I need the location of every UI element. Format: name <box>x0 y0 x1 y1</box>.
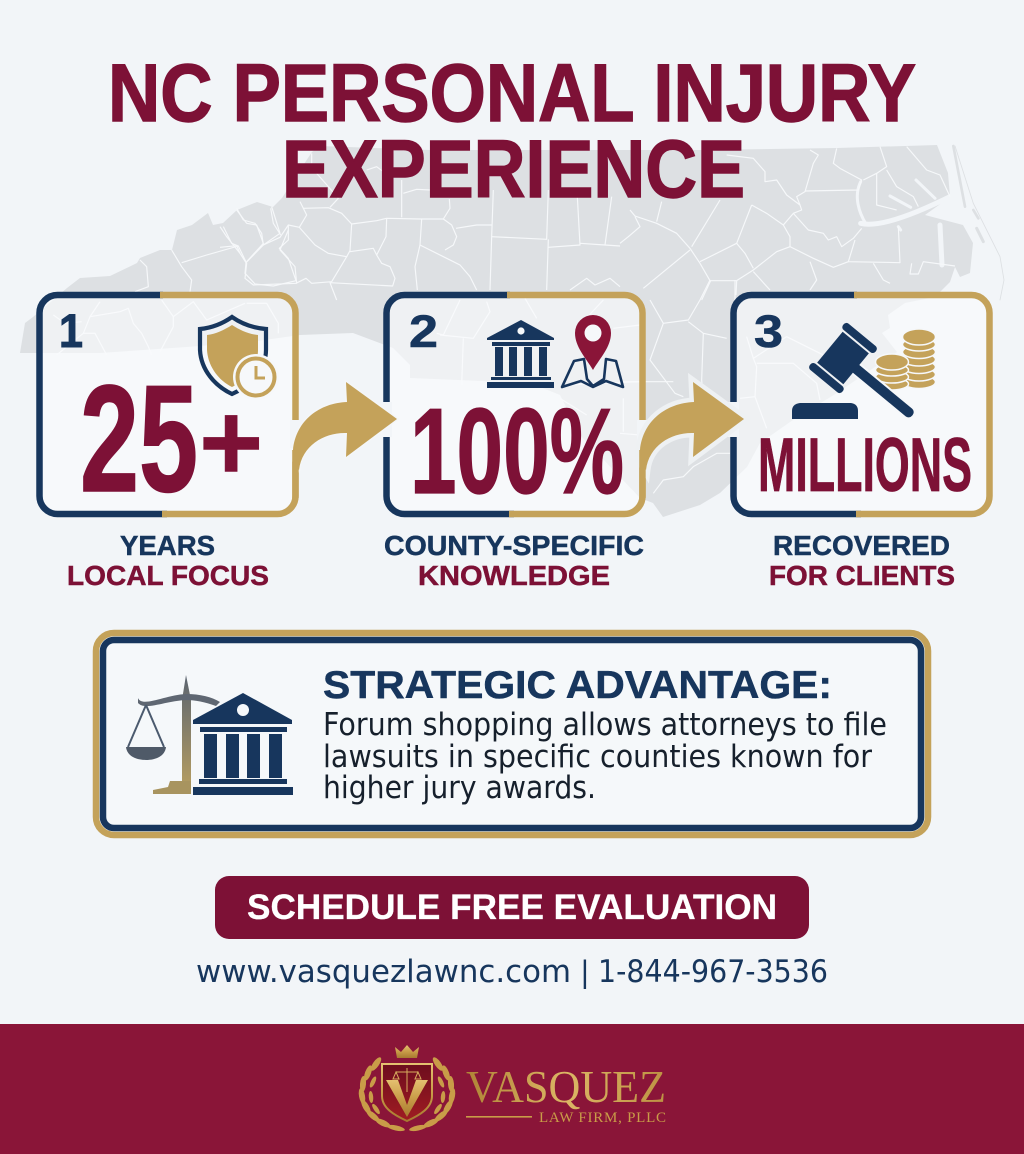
caption: step 1: LOCAL FOCUS <box>67 560 269 591</box>
letter V <box>386 1080 428 1117</box>
icon: gavel <box>792 321 932 439</box>
icon: shield with clock <box>200 317 279 400</box>
caption: step 3: FOR CLIENTS <box>769 560 955 591</box>
icon: map pin on folded map <box>562 315 623 387</box>
small scales <box>393 1068 421 1092</box>
arrow: step 2 to step 3 <box>637 382 744 498</box>
caption: step 2: COUNTY-SPECIFIC <box>384 530 644 561</box>
laurel wreath, left <box>358 1056 405 1132</box>
caption: step 1 <box>67 530 269 591</box>
contact line <box>196 954 828 990</box>
panel: step 1, 25+ years <box>40 295 296 524</box>
caption: step 3: RECOVERED <box>773 530 950 561</box>
caption: step 2 <box>384 530 644 591</box>
caption: step 1: YEARS <box>120 530 215 561</box>
logo: wordmark: LAW FIRM, PLLC <box>539 1110 666 1126</box>
icon: scales of justice <box>126 675 220 794</box>
body text: lawsuits in specific counties known for <box>323 739 872 775</box>
heading: STRATEGIC ADVANTAGE: <box>323 664 832 707</box>
logo: crest <box>358 1045 456 1132</box>
body text: Forum shopping allows attorneys to file <box>323 707 887 743</box>
body text <box>323 707 887 806</box>
footer band <box>0 1024 1024 1154</box>
laurel wreath, right <box>409 1056 456 1132</box>
statistic 100%: 100% <box>410 383 624 519</box>
icon: coin stacks <box>876 329 936 390</box>
step number 2: 2 <box>409 306 438 357</box>
title <box>108 48 916 215</box>
step number 1: 1 <box>59 304 83 357</box>
arrow: step 1 to step 2 <box>290 382 397 498</box>
body text: higher jury awards. <box>323 770 596 806</box>
call to action button: SCHEDULE FREE EVALUATION <box>247 888 777 927</box>
contact line: | <box>580 955 590 989</box>
statistic 25+: 25 <box>80 354 198 524</box>
logo: wordmark: VASQUEZ <box>466 1062 666 1112</box>
contact line: 1-844-967-3536 <box>598 954 828 990</box>
title: EXPERIENCE <box>282 124 745 215</box>
step number 3: 3 <box>754 306 783 357</box>
title: NC PERSONAL INJURY <box>108 48 916 139</box>
caption: step 2: KNOWLEDGE <box>418 560 610 591</box>
call to action button <box>215 876 809 939</box>
background map: North Carolina counties <box>20 145 1004 517</box>
shield <box>382 1064 432 1121</box>
contact line: www.vasquezlawnc.com <box>196 954 571 990</box>
panel: step 3, millions recovered <box>734 295 990 514</box>
icon: courthouse <box>193 693 293 795</box>
statistic 25+: + <box>199 381 263 504</box>
icon: courthouse <box>487 320 554 388</box>
crown <box>395 1045 419 1058</box>
panel: strategic advantage <box>96 633 928 835</box>
panel: step 2, 100% county knowledge <box>386 295 642 519</box>
caption: step 3 <box>769 530 955 591</box>
